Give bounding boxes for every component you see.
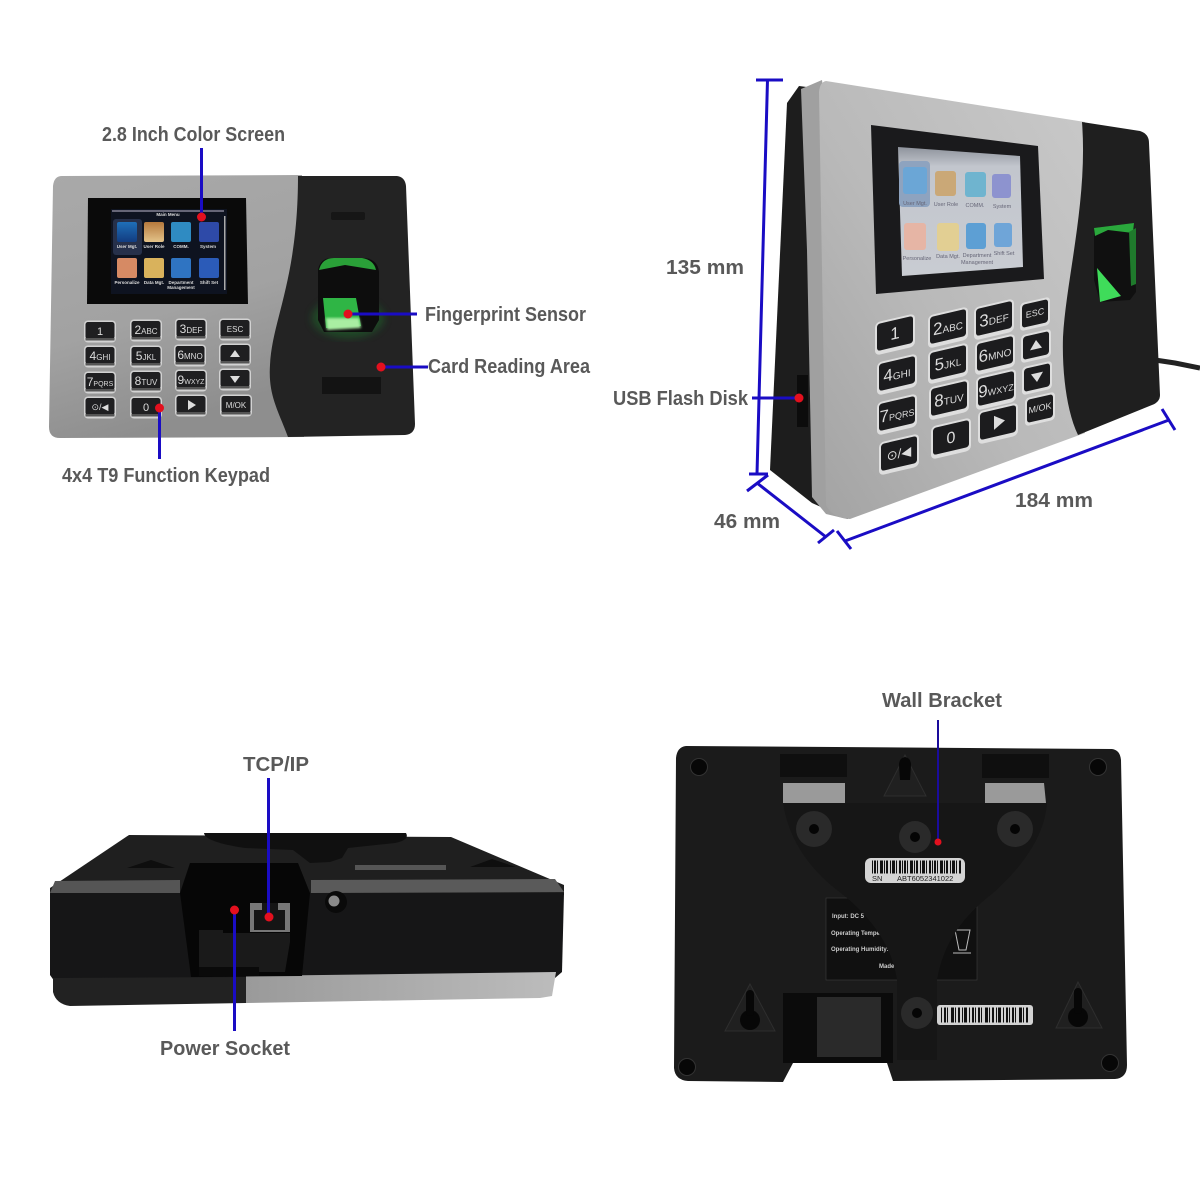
callout: fingerprint sensor: Fingerprint Sensor bbox=[425, 304, 586, 326]
dimension: width 184 mm: 184 mm bbox=[1015, 490, 1093, 512]
screen frame bbox=[871, 125, 1044, 294]
barcode strip bbox=[355, 865, 446, 870]
keypad: 9WXYZ bbox=[178, 373, 205, 387]
serial number label: SN bbox=[872, 874, 882, 883]
menu labels: COMM. bbox=[173, 244, 189, 249]
menu labels: System bbox=[200, 244, 216, 249]
keyholes bbox=[725, 982, 1102, 1031]
keypad angled: 5JKL bbox=[935, 349, 962, 375]
dimension: depth 46 mm: 46 mm bbox=[714, 511, 780, 533]
center keyhole bbox=[884, 755, 926, 796]
bracket pegs bbox=[796, 811, 1033, 1029]
dimension: width 184 mm bbox=[837, 409, 1175, 549]
top tabs bbox=[780, 754, 1049, 778]
menu labels: Personalize bbox=[114, 280, 140, 285]
menu icons bbox=[113, 219, 219, 278]
menu labels: Management bbox=[167, 285, 195, 290]
display labels: Department bbox=[963, 253, 992, 259]
callout: card reading area: Card Reading Area bbox=[428, 356, 591, 378]
keypad angled: 9WXYZ bbox=[978, 374, 1014, 402]
keyhole bumps bbox=[127, 860, 175, 868]
display labels: Personalize bbox=[903, 256, 931, 262]
keypad: ⊙/◀ bbox=[92, 402, 109, 412]
card reader window bbox=[322, 377, 381, 394]
ridge bands bbox=[50, 880, 180, 893]
wall bracket plate bbox=[783, 803, 1047, 1060]
display icons bbox=[899, 161, 1012, 251]
keypad: 1 bbox=[97, 326, 103, 338]
callout: keypad: 4x4 T9 Function Keypad bbox=[62, 465, 270, 487]
menu labels: Data Mgt. bbox=[144, 280, 164, 285]
display labels: Data Mgt. bbox=[936, 254, 960, 260]
LCD screen: Main Menu bbox=[156, 212, 180, 217]
display bbox=[898, 147, 1023, 276]
panel: bottom view device bbox=[50, 833, 564, 1006]
callout: TCP/IP bbox=[243, 754, 309, 922]
silver pads bbox=[783, 783, 1046, 803]
panel: front view device bbox=[49, 175, 415, 438]
device body silver bbox=[49, 175, 304, 438]
keypad angled: 0 bbox=[947, 428, 955, 448]
keypad angled: 2ABC bbox=[933, 313, 963, 339]
display labels: COMM. bbox=[966, 203, 985, 209]
LCD screen bbox=[87, 198, 248, 304]
top surface bbox=[50, 835, 564, 895]
display labels: User Mgt. bbox=[903, 201, 927, 207]
side housing bbox=[770, 86, 848, 519]
back housing bbox=[674, 746, 1127, 1082]
keypad angled: 3DEF bbox=[979, 305, 1009, 331]
serial number label bbox=[865, 858, 965, 883]
USB port bbox=[797, 375, 808, 427]
display labels bbox=[903, 201, 1015, 266]
callout: color screen: 2.8 Inch Color Screen bbox=[102, 124, 285, 146]
callout: power socket: Power Socket bbox=[160, 1038, 290, 1060]
keypad angled: 6MNO bbox=[979, 339, 1012, 367]
panel: angled view device bbox=[770, 80, 1200, 519]
keypad: 6MNO bbox=[177, 348, 203, 362]
keypad: 4GHI bbox=[90, 349, 110, 363]
silver bevel bbox=[801, 80, 860, 519]
speaker slot bbox=[331, 212, 365, 220]
keypad bbox=[84, 318, 252, 418]
callout: keypad bbox=[62, 404, 270, 487]
callout: power socket bbox=[160, 906, 290, 1060]
fingerprint sensor bbox=[312, 258, 384, 338]
black rating label: Operating Humidity: bbox=[831, 947, 889, 953]
menu labels bbox=[114, 244, 219, 290]
keypad: 2ABC bbox=[134, 323, 158, 337]
callout: color screen bbox=[102, 124, 285, 222]
device dark fingerprint side bbox=[270, 176, 415, 437]
keypad angled: M/OK bbox=[1029, 400, 1051, 416]
black rating label: Operating Tempe bbox=[831, 931, 881, 937]
serial number label: ABT6052341022 bbox=[897, 874, 953, 883]
fingerprint sensor bbox=[1094, 223, 1136, 302]
screw bbox=[325, 891, 347, 913]
callout: USB flash disk: USB Flash Disk bbox=[613, 388, 749, 410]
menu labels: Shift Set bbox=[200, 280, 219, 285]
mount bracket edge bbox=[204, 833, 407, 863]
lower black lip bbox=[53, 977, 246, 1006]
barcode label bbox=[937, 1005, 1033, 1025]
front face bbox=[50, 893, 564, 982]
black rating label: Made bbox=[879, 964, 895, 970]
keypad: 8TUV bbox=[135, 374, 158, 388]
keypad angled: 1 bbox=[890, 322, 900, 344]
keypad: 5JKL bbox=[136, 349, 157, 363]
menu labels: User Mgt. bbox=[117, 244, 137, 249]
callout: wall bracket: Wall Bracket bbox=[882, 690, 1002, 712]
dark fingerprint section bbox=[1063, 122, 1160, 435]
silver strip bbox=[246, 972, 556, 1003]
display labels: User Role bbox=[934, 202, 958, 208]
callout: wall bracket bbox=[882, 690, 1002, 846]
keypad angled bbox=[875, 297, 1055, 476]
step block bbox=[199, 930, 290, 972]
recess bbox=[783, 993, 893, 1063]
dimension: height 135 mm bbox=[666, 80, 783, 474]
keypad: ESC bbox=[227, 325, 243, 334]
panel: back view device bbox=[674, 746, 1127, 1082]
corner screw holes bbox=[678, 758, 1118, 1076]
RJ45 port bbox=[250, 903, 290, 932]
display labels: Shift Set bbox=[994, 251, 1015, 257]
keypad angled: 8TUV bbox=[934, 385, 964, 411]
keypad: 7PQRS bbox=[87, 375, 114, 389]
power cable bbox=[1155, 360, 1200, 368]
silver front face bbox=[819, 81, 1085, 519]
black rating label: Input: DC 5 bbox=[832, 914, 865, 920]
keypad angled: ⊙/◀ bbox=[887, 443, 911, 464]
recess bbox=[180, 863, 310, 977]
keypad angled: 4GHI bbox=[883, 360, 911, 386]
menu labels: User Role bbox=[143, 244, 165, 249]
display labels: System bbox=[993, 204, 1012, 210]
menu labels: Department bbox=[168, 280, 194, 285]
keypad: 0 bbox=[143, 402, 149, 414]
keypad: 3DEF bbox=[180, 322, 202, 336]
black rating label bbox=[826, 898, 977, 980]
keypad: M/OK bbox=[226, 401, 247, 410]
callout: fingerprint sensor bbox=[344, 304, 586, 326]
callout: TCP/IP: TCP/IP bbox=[243, 754, 309, 776]
keypad angled: ESC bbox=[1026, 306, 1045, 320]
keypad angled: 7PQRS bbox=[880, 399, 914, 427]
dimension: depth 46 mm bbox=[714, 475, 834, 543]
dimension: height 135 mm: 135 mm bbox=[666, 257, 744, 279]
display labels: Management bbox=[961, 260, 994, 266]
